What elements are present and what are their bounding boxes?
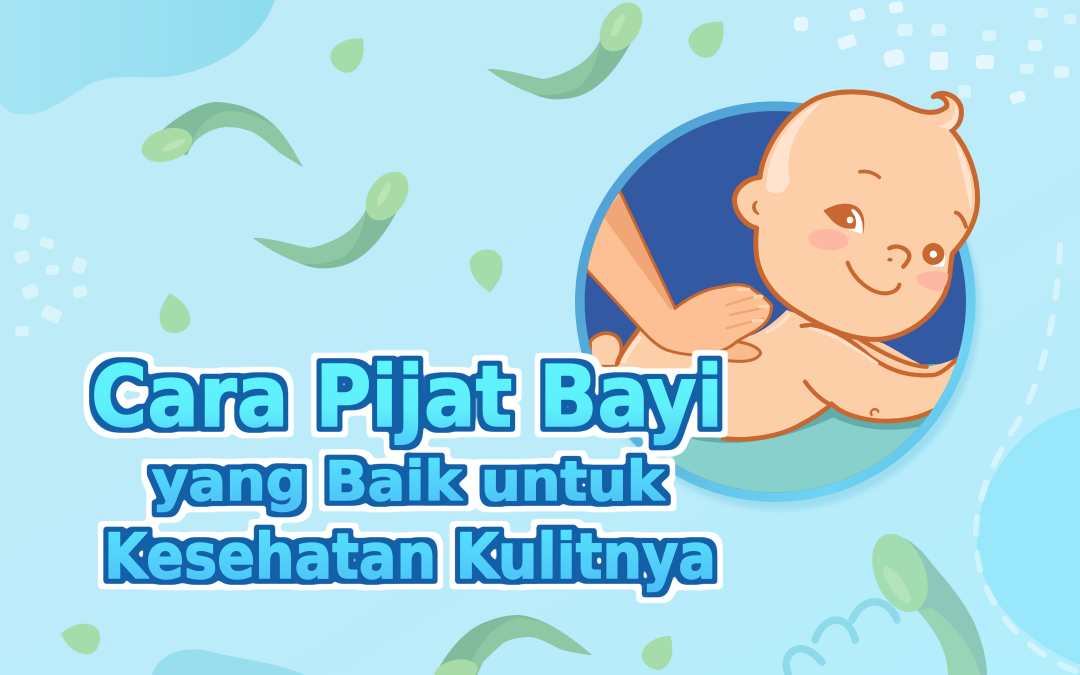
- towel: [664, 416, 928, 492]
- nostril: [887, 258, 893, 261]
- dashed arc: right: [976, 245, 1078, 672]
- forearm shade: [603, 195, 673, 310]
- baby body: [617, 310, 980, 438]
- thumb: [720, 342, 761, 361]
- nose: [889, 247, 909, 267]
- circle frame: [575, 101, 976, 502]
- pattern: left dots: [12, 212, 88, 336]
- mouth: [848, 263, 899, 293]
- arm outline: [802, 325, 960, 405]
- right eye: [922, 243, 945, 267]
- towel shadow: [690, 364, 956, 443]
- inner ear: [753, 202, 758, 214]
- finger nails: [738, 289, 767, 321]
- circle background: [585, 111, 966, 492]
- adult forearm: [573, 192, 772, 355]
- body highlight: [624, 337, 640, 363]
- title: [91, 348, 723, 593]
- blob: top left: [0, 0, 275, 115]
- illustration: baby massage: [560, 92, 993, 513]
- circle shadow: [580, 110, 980, 510]
- pattern: top right dots: [794, 1, 1076, 105]
- blob: bottom left: [152, 649, 305, 675]
- cheek highlight right: [953, 137, 972, 212]
- title line 1: Cara Pijat Bayi: [91, 348, 723, 447]
- aloe leaf: large bottom right: [861, 526, 987, 675]
- baby foot: [590, 333, 621, 367]
- aloe leaf: bottom: [432, 615, 592, 675]
- left eye: [823, 204, 864, 235]
- aloe drops: [57, 11, 735, 675]
- head highlight: [767, 101, 823, 193]
- decoration: cloud line: [786, 602, 897, 673]
- finger lines: [727, 295, 768, 328]
- eyebrow right: [956, 213, 966, 227]
- left cheek: [807, 227, 850, 252]
- aloe leaf: top: [487, 0, 651, 99]
- highlight shoulder: [810, 328, 877, 363]
- right cheek: [916, 271, 948, 292]
- elbow curl: [871, 409, 878, 415]
- eyebrow: [860, 171, 879, 177]
- blob: right: [977, 408, 1080, 665]
- body outline: [617, 328, 960, 439]
- curl highlight: [938, 102, 959, 129]
- aloe leaf: upper left: [137, 102, 303, 168]
- neck highlight: [767, 315, 788, 332]
- aloe leaf: centre: [253, 164, 417, 268]
- title line 2: yang Baik untuk: [152, 450, 665, 513]
- baby head: [734, 92, 977, 339]
- title line 3: Kesehatan Kulitnya: [104, 520, 716, 593]
